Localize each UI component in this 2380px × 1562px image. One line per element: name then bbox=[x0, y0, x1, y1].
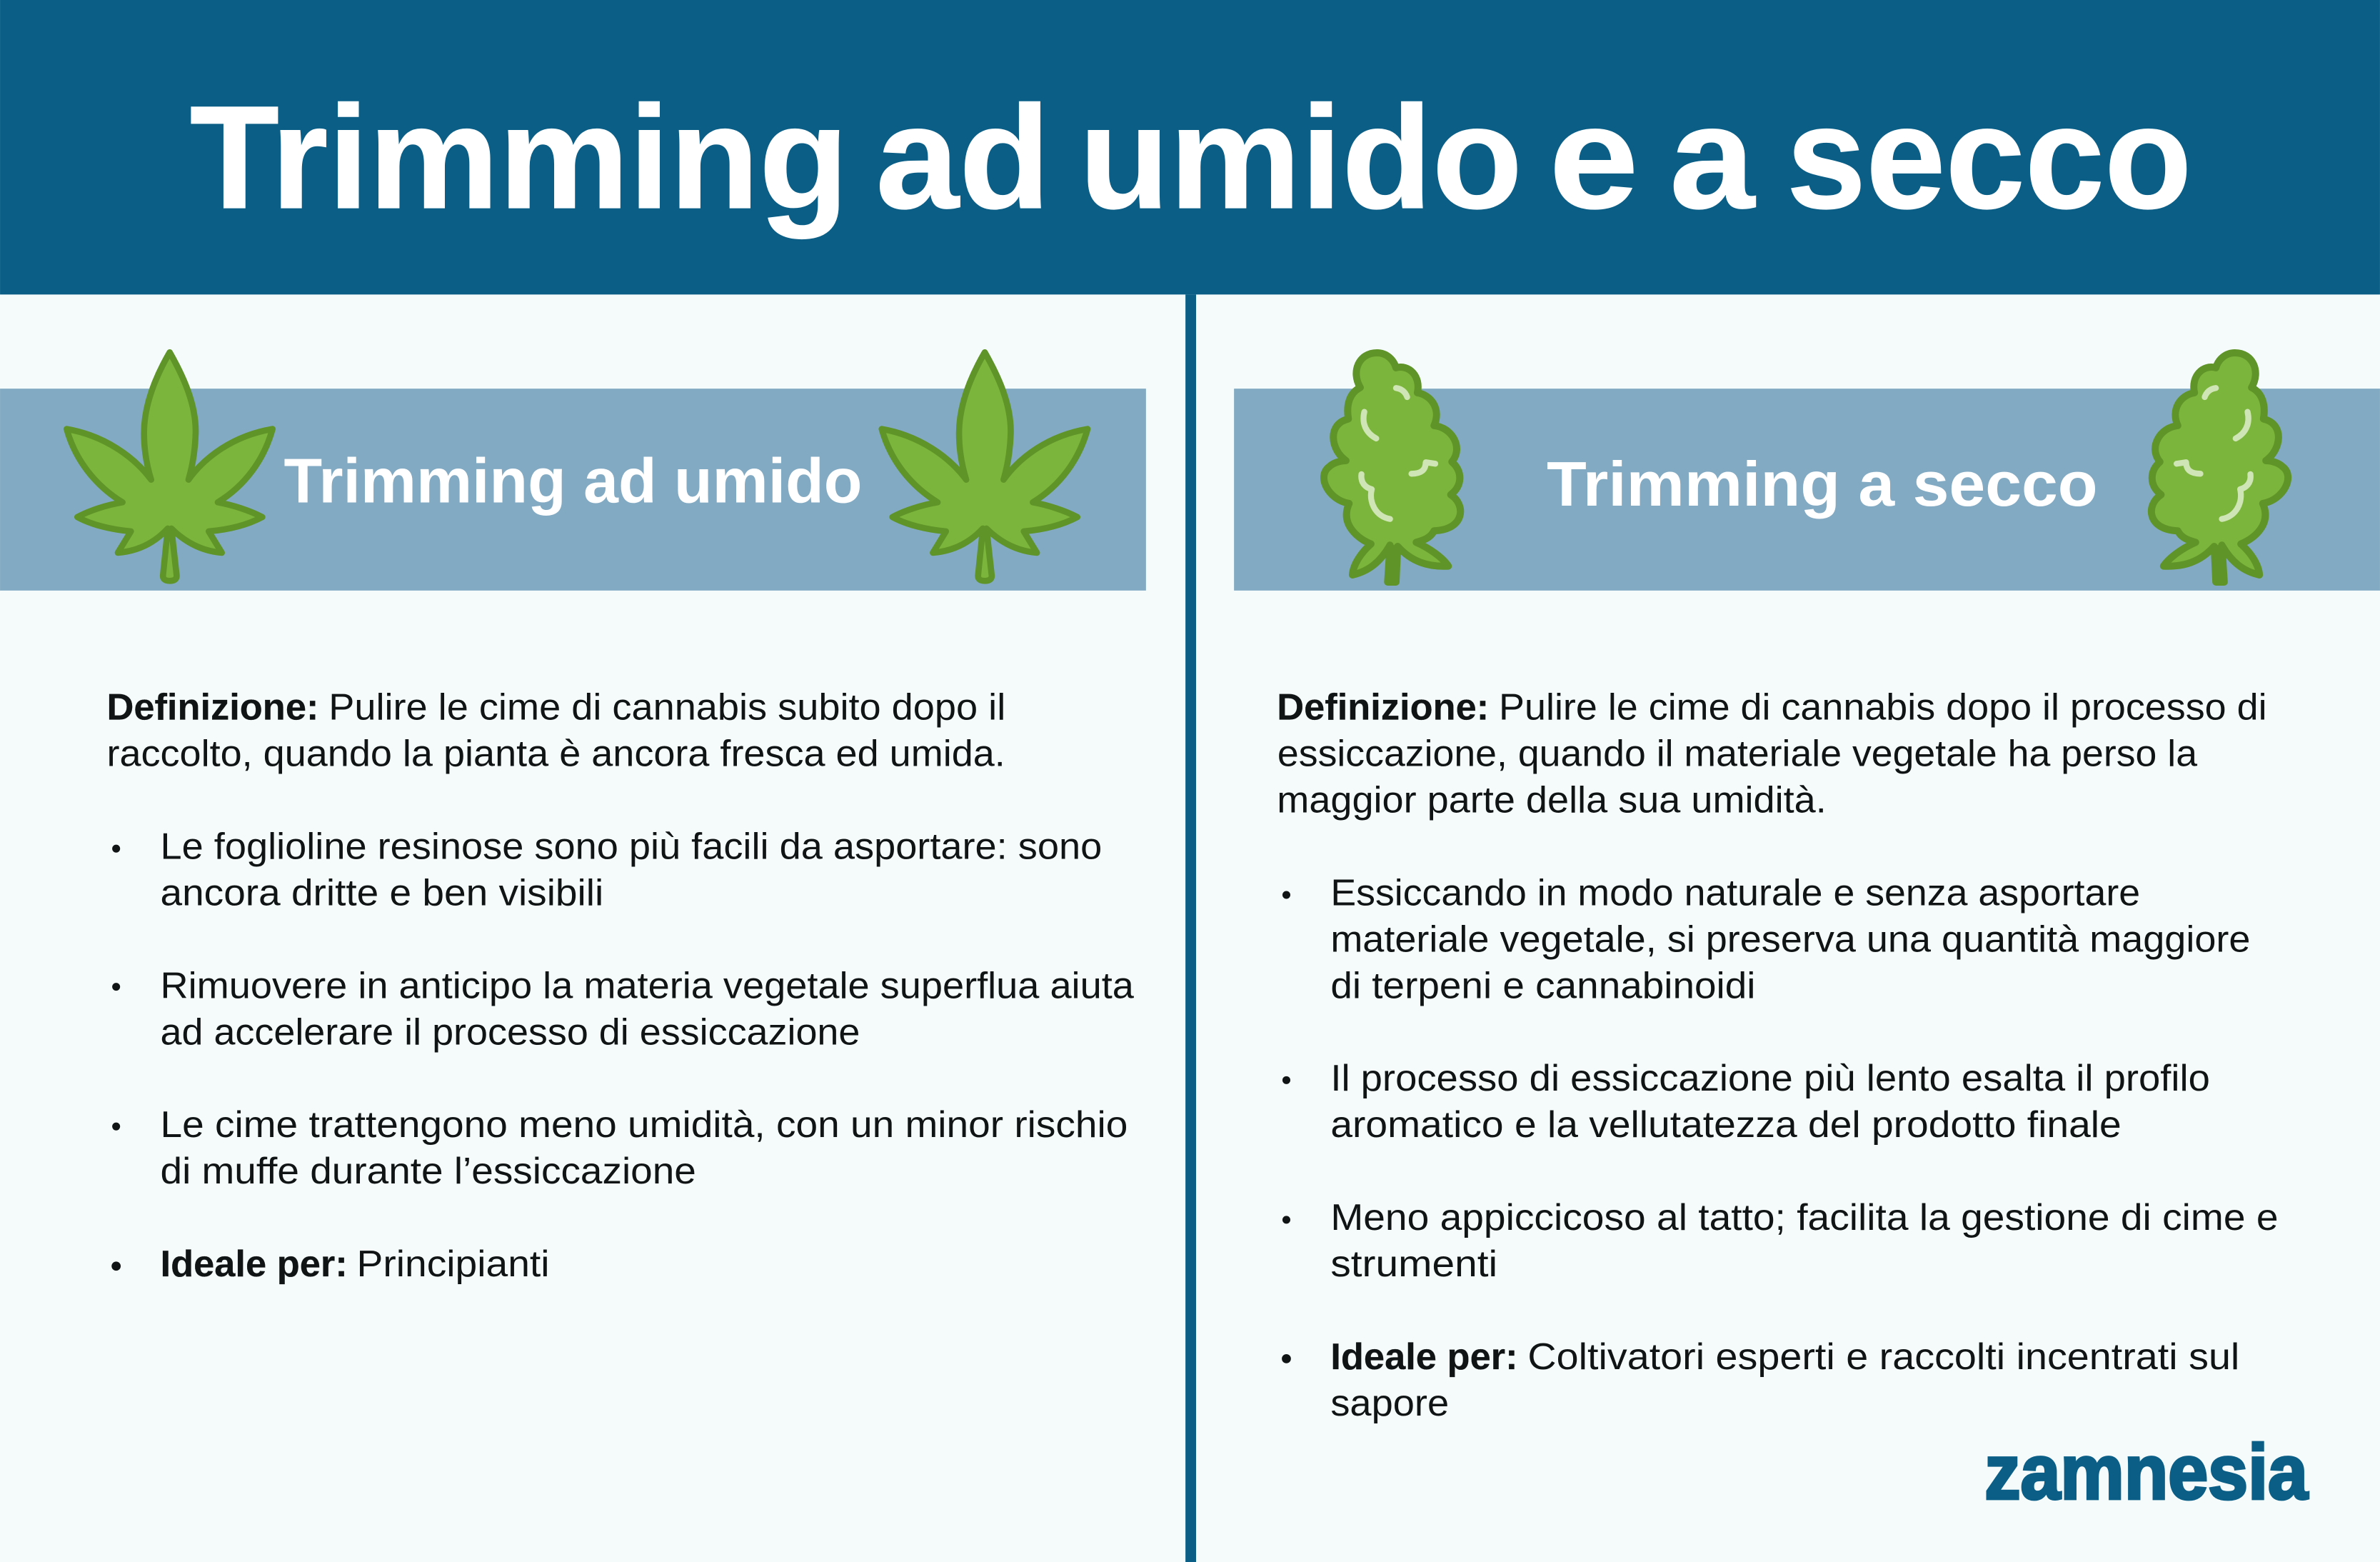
text: dry trimming definition: maggior parte della sua umidità. bbox=[1277, 780, 1827, 821]
text: dry trimming definition: Pulire le cime di cannabis dopo il processo di bbox=[1499, 687, 2267, 729]
list: dry trimming points: Meno appiccicoso al tatto; facilita la gestione di cime e bbox=[1330, 1197, 2279, 1238]
heading band: wet trimming bbox=[0, 352, 1146, 591]
list: dry trimming points: Ideale per: bbox=[1330, 1336, 1518, 1378]
list: dry trimming points: materiale vegetale, si preserva una quantità maggiore bbox=[1330, 919, 2250, 961]
heading band: dry trimming bbox=[1234, 353, 2380, 591]
title: a bbox=[1669, 76, 1756, 239]
panel: dry trimming bbox=[1234, 353, 2380, 1424]
text: wet trimming definition bbox=[106, 687, 1005, 775]
list: dry trimming points bbox=[1282, 872, 2279, 1424]
panel: wet trimming bbox=[0, 352, 1146, 1285]
list: wet trimming points: Le foglioline resinose sono più facili da asportare: sono bbox=[161, 826, 1102, 867]
list: wet trimming points: di muffe durante l’essiccazione bbox=[161, 1151, 696, 1192]
icon: cannabis leaf right bbox=[882, 352, 1088, 581]
text: dry trimming definition: Definizione: bbox=[1277, 687, 1489, 729]
list: dry trimming points: Il processo di essiccazione più lento esalta il profilo bbox=[1330, 1058, 2210, 1099]
text: dry trimming definition bbox=[1277, 687, 2267, 821]
text: dry trimming definition: essiccazione, quando il materiale vegetale ha perso la bbox=[1277, 734, 2197, 775]
title: secco bbox=[1787, 76, 2191, 239]
list: wet trimming points: Ideale per: bbox=[161, 1243, 348, 1285]
icon: cannabis leaf left bbox=[66, 352, 273, 581]
heading: dry trimming: Trimming a secco bbox=[1547, 449, 2098, 519]
list: dry trimming points: Essiccando in modo naturale e senza asportare bbox=[1330, 872, 2140, 913]
text: wet trimming definition: Definizione: bbox=[106, 687, 318, 729]
list: wet trimming points: ancora dritte e ben visibili bbox=[161, 872, 603, 913]
title: Trimming bbox=[190, 76, 848, 239]
list: dry trimming points: sapore bbox=[1330, 1383, 1449, 1424]
center divider bbox=[1185, 294, 1196, 1562]
heading: wet trimming: Trimming ad umido bbox=[284, 446, 862, 516]
list: dry trimming points: di terpeni e cannabinoidi bbox=[1330, 965, 1755, 1006]
icon: cannabis bud right bbox=[2151, 353, 2288, 583]
header banner bbox=[0, 0, 2380, 294]
list: dry trimming points: strumenti bbox=[1330, 1243, 1497, 1285]
logo: zamnesia: zamnesia bbox=[1984, 1429, 2309, 1516]
title: ad bbox=[876, 76, 1050, 239]
list: wet trimming points: Le cime trattengono meno umidità, con un minor rischio bbox=[161, 1104, 1128, 1146]
list: dry trimming points: Coltivatori esperti e raccolti incentrati sul bbox=[1527, 1336, 2239, 1378]
icon: cannabis bud left bbox=[1324, 353, 1460, 583]
text: wet trimming definition: raccolto, quando la pianta è ancora fresca ed umida. bbox=[106, 734, 1005, 775]
title bbox=[190, 76, 2191, 239]
title: umido bbox=[1079, 76, 1522, 239]
text: wet trimming definition: Pulire le cime di cannabis subito dopo il bbox=[328, 687, 1005, 729]
list: wet trimming points: ad accelerare il processo di essiccazione bbox=[161, 1011, 860, 1053]
title: e bbox=[1549, 76, 1639, 239]
list: wet trimming points: Rimuovere in anticipo la materia vegetale superflua aiuta bbox=[161, 965, 1134, 1006]
list: wet trimming points: Principianti bbox=[357, 1243, 550, 1285]
list: wet trimming points bbox=[111, 826, 1134, 1285]
list: dry trimming points: aromatico e la vellutatezza del prodotto finale bbox=[1330, 1104, 2122, 1146]
